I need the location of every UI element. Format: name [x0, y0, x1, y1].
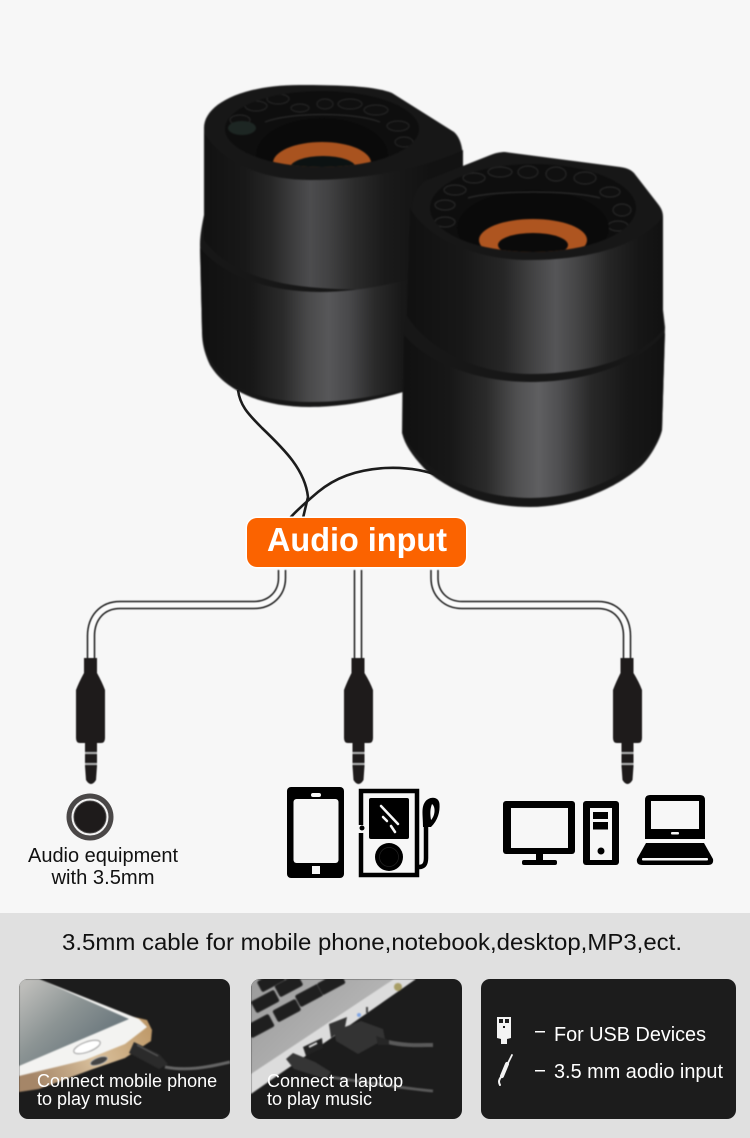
photo: laptop with cables — [245, 970, 433, 1094]
panel: connect mobile phone — [19, 979, 230, 1119]
badge: audio input — [246, 516, 468, 568]
photo: phone with jack plugged in — [19, 979, 230, 1092]
label: laptop: to play music — [267, 1089, 372, 1109]
icon: audio jack — [499, 1055, 512, 1085]
badge: audio input: Audio input — [267, 521, 447, 558]
speakers — [200, 85, 665, 507]
icon: smartphone — [287, 787, 344, 878]
label: audio equipment: Audio equipment — [28, 845, 178, 867]
speaker cables — [238, 390, 443, 518]
cable to phone and player — [344, 568, 373, 784]
panel: connect a laptop — [245, 970, 462, 1119]
right speaker — [402, 152, 665, 507]
cable to computers — [434, 568, 642, 784]
legend: audio input: 3.5 mm aodio input — [554, 1061, 723, 1083]
panel: connector legend — [481, 979, 736, 1119]
label: mobile phone: to play music — [37, 1089, 142, 1109]
icon: 3.5mm jack socket — [66, 794, 114, 840]
icon: laptop — [637, 795, 713, 865]
caption: cable compatibility: 3.5mm cable for mobile phone,notebook,desktop,MP3,ect. — [62, 929, 682, 955]
legend: usb devices: For USB Devices — [554, 1024, 706, 1046]
icon: mp3 player with earphone — [360, 791, 440, 875]
icon: desktop monitor — [503, 801, 575, 865]
icon: usb plug — [497, 1017, 511, 1044]
label: laptop: Connect a laptop — [267, 1071, 403, 1091]
icon: desktop tower — [583, 801, 619, 865]
label: mobile phone: Connect mobile phone — [37, 1071, 217, 1091]
label: audio equipment: with 3.5mm — [50, 867, 155, 889]
left speaker — [200, 85, 463, 407]
cable to audio equipment — [76, 568, 282, 784]
